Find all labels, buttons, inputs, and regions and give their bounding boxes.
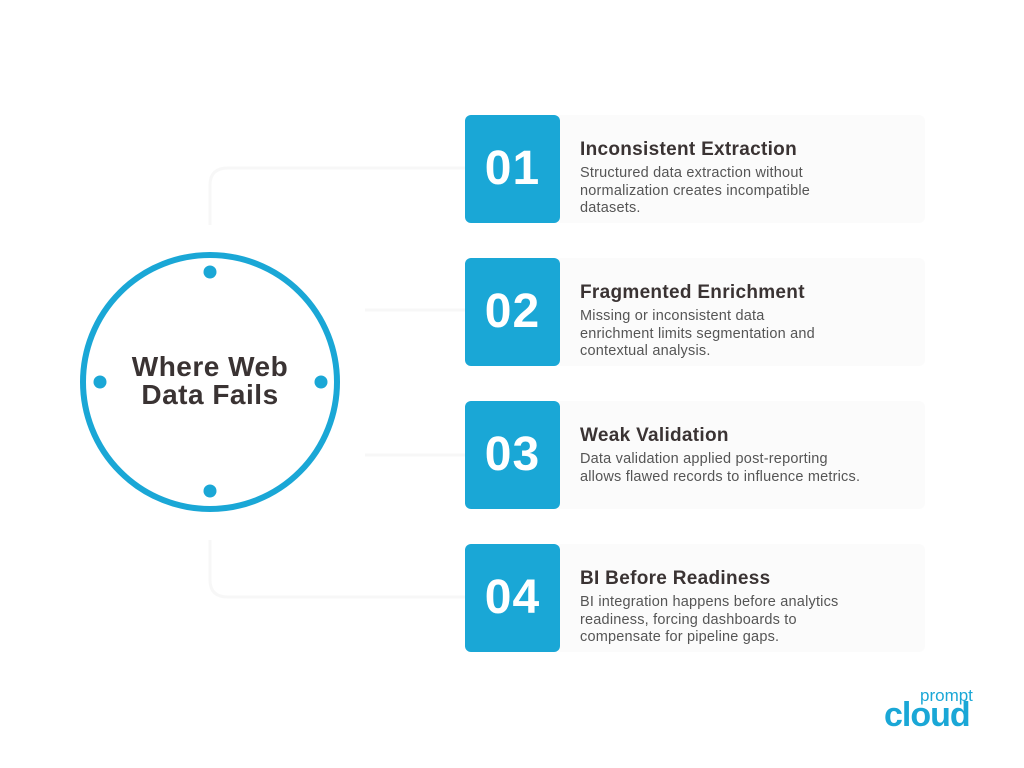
card 04: 04	[485, 571, 540, 624]
card 04: readiness, forcing dashboards to	[580, 612, 797, 628]
card 04: BI integration happens before analytics	[580, 594, 838, 610]
card 03: 03	[485, 428, 540, 481]
card 02: 02	[485, 285, 540, 338]
logo: prompt	[920, 686, 973, 705]
card 02: enrichment limits segmentation and	[580, 326, 815, 342]
logo: cloud	[884, 696, 970, 734]
card 01: datasets.	[580, 200, 641, 216]
card 03	[465, 401, 860, 509]
circle title: Data Fails	[141, 379, 279, 410]
card 04	[465, 544, 838, 652]
card 03: Weak Validation	[580, 425, 729, 446]
card 01: Structured data extraction without	[580, 165, 803, 181]
card 01: Inconsistent Extraction	[580, 139, 797, 160]
card 03: allows flawed records to influence metrics.	[580, 468, 860, 484]
card 03: Data validation applied post-reporting	[580, 451, 828, 467]
card 02: contextual analysis.	[580, 343, 711, 359]
central circle	[80, 252, 340, 512]
card 04: compensate for pipeline gaps.	[580, 629, 779, 645]
card 01	[465, 115, 810, 223]
card 02: Missing or inconsistent data	[580, 308, 765, 324]
circle title: Where Web	[132, 351, 288, 382]
card 01: 01	[485, 142, 540, 195]
card 02	[465, 258, 815, 366]
card 02: Fragmented Enrichment	[580, 282, 805, 303]
card 01: normalization creates incompatible	[580, 182, 810, 198]
circle title	[132, 351, 288, 410]
card 04: BI Before Readiness	[580, 568, 770, 589]
